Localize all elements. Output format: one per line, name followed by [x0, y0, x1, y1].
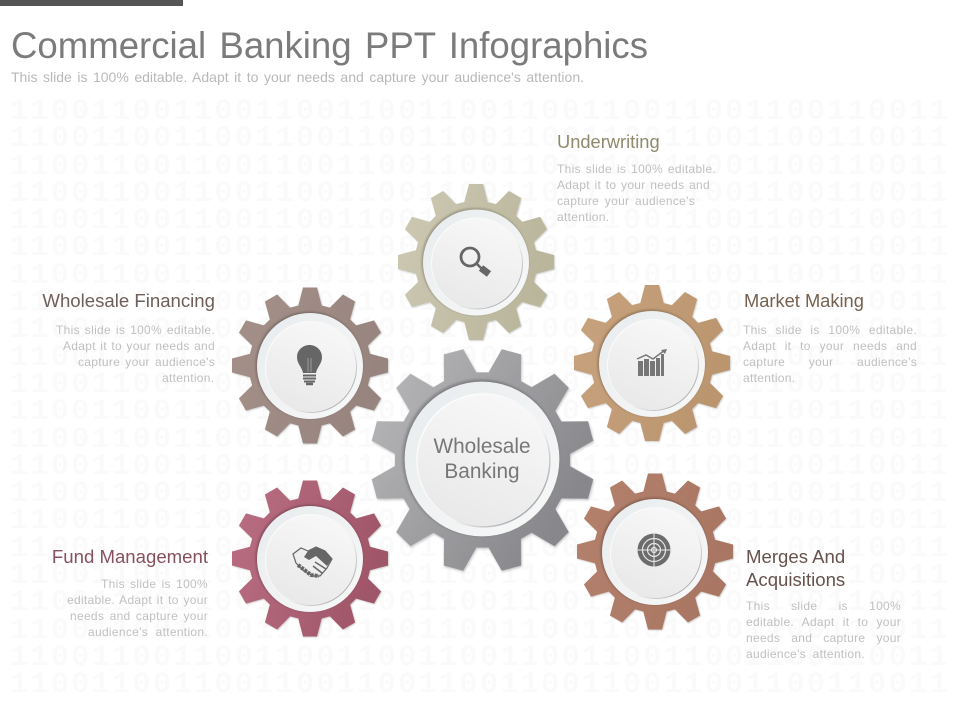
- text block: Merges And Acquisitions: Acquisitions: [746, 569, 845, 590]
- text block: Market Making: attention.: [743, 371, 795, 385]
- gear: Wholesale Financing: [232, 288, 388, 444]
- text block: Underwriting: capture your audience's: [557, 194, 695, 208]
- text block: Underwriting: This slide is 100% editable.: [557, 162, 716, 176]
- text block: Market Making: Adapt it to your needs and: [743, 339, 917, 353]
- gear: Fund Management: [232, 480, 388, 636]
- text block: Merges And Acquisitions: Merges And: [746, 546, 845, 567]
- icon: target: [636, 532, 672, 568]
- label: Wholesale Banking: Wholesale: [433, 435, 531, 458]
- text block: Wholesale Financing: attention.: [162, 371, 214, 385]
- text block: Merges And Acquisitions: [746, 546, 901, 661]
- gear: Underwriting: [398, 184, 554, 340]
- text block: Market Making: Market Making: [744, 290, 864, 311]
- text block: Market Making: [743, 290, 917, 385]
- icon: magnifier: [461, 248, 489, 274]
- subtitle: This slide is 100% editable. Adapt it to your needs and capture your audience's attention.: [11, 69, 584, 85]
- text block: Underwriting: Adapt it to your needs and: [557, 178, 710, 192]
- text block: Wholesale Financing: Wholesale Financing: [42, 290, 215, 311]
- label: Wholesale Banking: Banking: [444, 460, 520, 483]
- text block: Underwriting: Underwriting: [557, 131, 660, 152]
- text block: Fund Management: This slide is 100%: [101, 577, 208, 591]
- gear: Market Making: [574, 285, 730, 441]
- gear: Wholesale Banking: [345, 323, 620, 597]
- text block: Fund Management: needs and capture your: [70, 609, 208, 623]
- icon: light bulb: [297, 345, 322, 384]
- text block: Merges And Acquisitions: editable. Adapt it to your: [746, 615, 901, 629]
- text block: Merges And Acquisitions: audience's attention.: [746, 647, 865, 661]
- text block: Fund Management: [52, 546, 208, 639]
- text block: Merges And Acquisitions: This slide is 100%: [746, 599, 901, 613]
- title: Commercial Banking PPT Infographics: [11, 25, 648, 66]
- text block: Fund Management: audience's attention.: [88, 625, 208, 639]
- text block: Wholesale Financing: [42, 290, 215, 385]
- text block: Underwriting: attention.: [557, 210, 609, 224]
- icon: handshake: [293, 547, 332, 576]
- text: 1100110011001100110011001100110011001100110011 1100110011001100110011001100110011001100110011 1100110011001100110011001100110011001100110011 1100110011001100110011001100110011001100110011 1100110011001100110011001100110011001100110011 1100110011001100110011001100110011001100110011 1100110011001100110011001100110011001100110011 1100110011001100110011001100110011001100110011 1100110011001100110011001100110011001100110011 1100110011001100110011001100110011001100110011 1100110011001100110011001100110011001100110011 1100110011001100110011001100110011001100110011 1100110011001100110011001100110011001100110011 1100110011001100110011001100110011001100110011 1100110011001100110011001100110011001100110011 1100110011001100110011001100110011001100110011 1100110011001100110011001100110011001100110011 1100110011001100110011001100110011001100110011 1100110011001100110011001100110011001100110011 1100110011001100110011001100110011001100110011 1100110011001100110011001100110011001100110011 1100110011001100110011001100110011001100110011: [10, 95, 950, 702]
- text block: Fund Management: Fund Management: [52, 546, 208, 567]
- text block: Underwriting: [557, 131, 716, 224]
- text block: Wholesale Financing: Adapt it to your needs and: [63, 339, 215, 353]
- text block: Wholesale Financing: This slide is 100% editable.: [56, 323, 215, 337]
- text block: Fund Management: editable. Adapt it to your: [67, 593, 208, 607]
- text block: Wholesale Financing: capture your audience's: [78, 355, 215, 369]
- gear: Merges And Acquisitions: [577, 474, 733, 630]
- text block: Market Making: capture your audience's: [743, 355, 917, 369]
- text block: Merges And Acquisitions: needs and capture your: [746, 631, 901, 645]
- text block: Market Making: This slide is 100% editable.: [743, 323, 917, 337]
- icon: bar chart with arrow: [637, 349, 667, 376]
- label: Wholesale Banking: [433, 435, 531, 483]
- top accent bar: [0, 0, 183, 6]
